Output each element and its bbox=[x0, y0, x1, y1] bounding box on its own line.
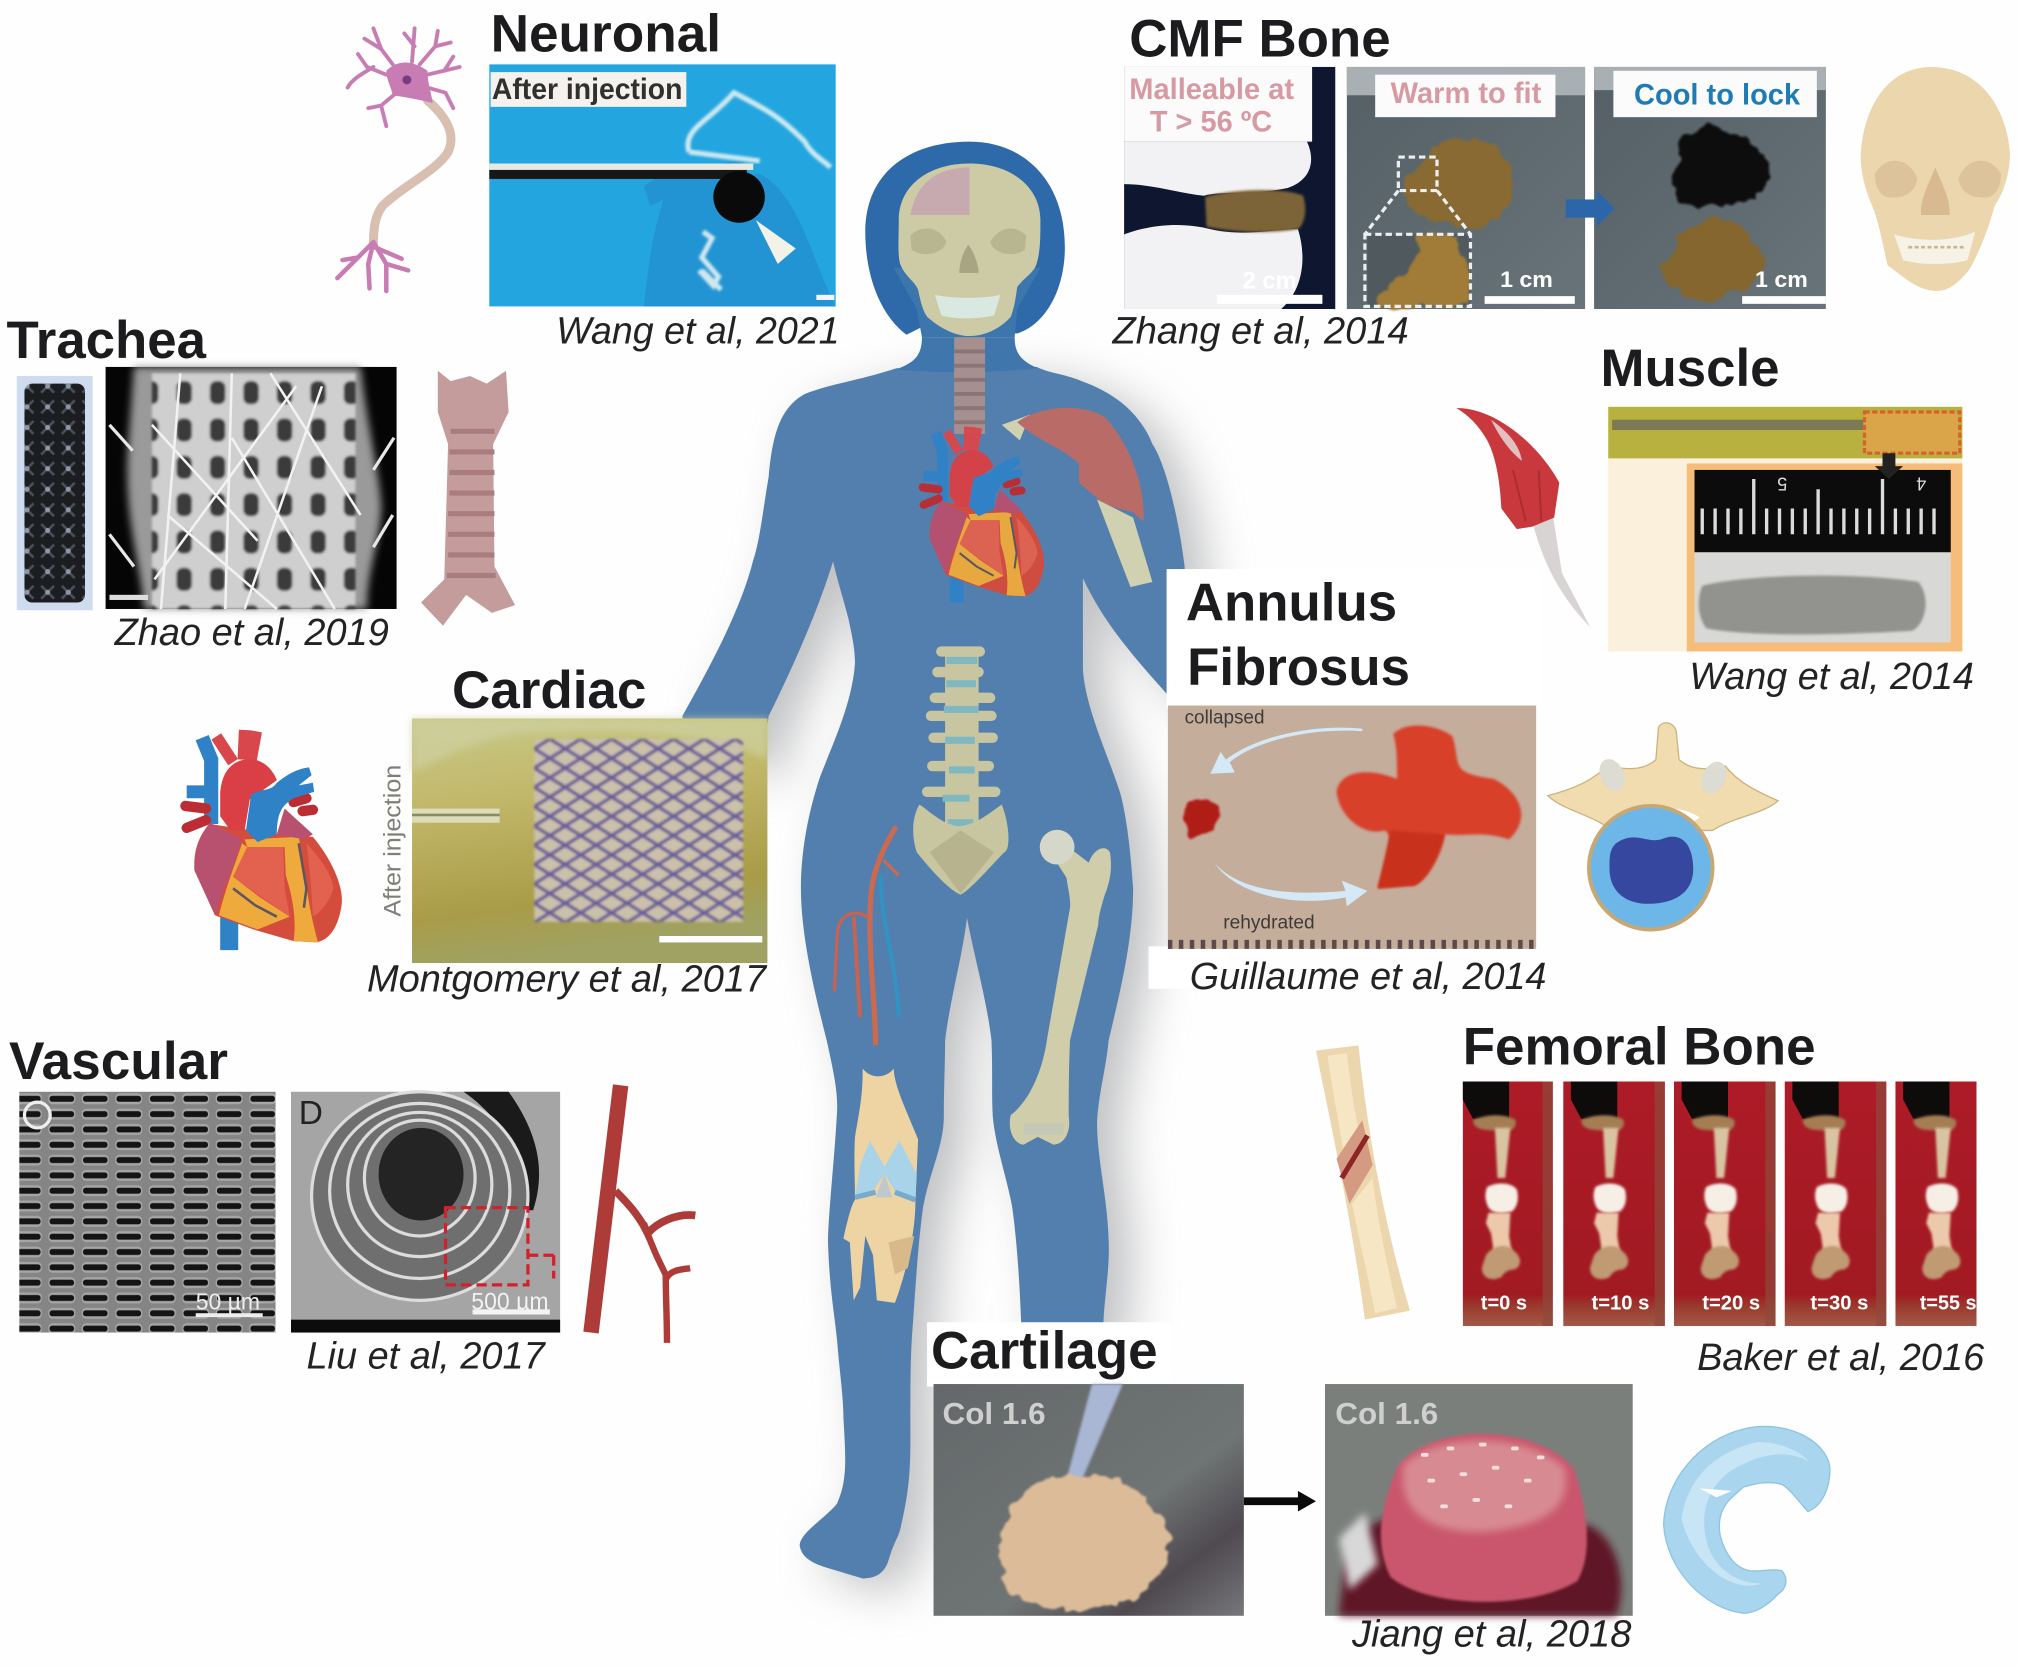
photo: printed tube bbox=[17, 376, 93, 610]
heading: Trachea bbox=[6, 311, 207, 370]
panel: femoral bone bbox=[1316, 1018, 1985, 1379]
heading bbox=[1186, 574, 1410, 697]
heading: Vascular bbox=[9, 1032, 228, 1091]
citation: Montgomery et al, 2017 bbox=[367, 958, 768, 1000]
citation: Guillaume et al, 2014 bbox=[1190, 956, 1546, 998]
arrow: warm to cool bbox=[1566, 191, 1615, 227]
icon: heart bbox=[185, 730, 342, 950]
photo: malleable at temperature: 2 cm bbox=[1243, 267, 1297, 294]
panel: cardiac bbox=[185, 661, 768, 1000]
heading: Neuronal bbox=[491, 5, 721, 63]
icon: trachea bbox=[421, 371, 515, 626]
heart in chest bbox=[923, 427, 1044, 602]
panel: vascular bbox=[9, 1032, 695, 1378]
jaw shade bbox=[894, 268, 1040, 337]
photo: muscle scaffold: 4 bbox=[1916, 474, 1926, 494]
heading: Fibrosus bbox=[1187, 638, 1410, 697]
arrow: injection to result bbox=[1244, 1491, 1316, 1512]
citation: Wang et al, 2021 bbox=[556, 311, 840, 353]
citation: Zhang et al, 2014 bbox=[1112, 311, 1409, 353]
citation: Baker et al, 2016 bbox=[1697, 1337, 1985, 1379]
citation: Wang et al, 2014 bbox=[1689, 656, 1974, 698]
photo: malleable at temperature: Malleable at bbox=[1129, 73, 1294, 106]
icon: meniscus bbox=[1664, 1426, 1830, 1613]
citation: Jiang et al, 2018 bbox=[1351, 1614, 1631, 1656]
photo: cardiac patch bbox=[412, 718, 767, 963]
photo: cool to lock: Cool to lock bbox=[1634, 78, 1801, 111]
photo: formed scaffold bbox=[1325, 1384, 1633, 1616]
white box behind annulus title bbox=[1167, 569, 1540, 708]
photo: injection in brain phantom: After injection bbox=[492, 73, 682, 106]
white patch beside annulus caption bbox=[1149, 946, 1226, 989]
photo: shape recovery: collapsed bbox=[1185, 708, 1264, 729]
photo series: bone filling: t=10 s bbox=[1592, 1291, 1649, 1314]
photo series: bone filling bbox=[1463, 1081, 1977, 1326]
panel: trachea bbox=[6, 311, 515, 654]
photo: formed scaffold: Col 1.6 bbox=[1335, 1396, 1438, 1431]
panel: neuronal bbox=[337, 5, 840, 353]
rotated photo label: After injection bbox=[379, 765, 406, 917]
icon: fractured bone bbox=[1316, 1045, 1410, 1320]
heading: CMF Bone bbox=[1129, 10, 1391, 69]
lumbar spine bbox=[913, 648, 1008, 895]
heading: Annulus bbox=[1186, 574, 1397, 633]
citation: Liu et al, 2017 bbox=[306, 1336, 547, 1378]
photo series: bone filling: t=0 s bbox=[1481, 1291, 1527, 1314]
body silhouette bbox=[682, 367, 1185, 1578]
icon: skull bbox=[1861, 67, 2010, 291]
photo series: bone filling: t=20 s bbox=[1702, 1291, 1760, 1314]
photo: muscle scaffold bbox=[1608, 407, 1962, 651]
photo: warm to fit: Warm to fit bbox=[1391, 77, 1541, 110]
human body figure with organs bbox=[682, 142, 1185, 1578]
photo: rolled tube bbox=[291, 1092, 560, 1333]
femur bbox=[1010, 830, 1111, 1145]
photo: injection of scaffold bbox=[934, 1384, 1244, 1616]
icon: neuron bbox=[337, 28, 460, 291]
white box behind cartilage title bbox=[927, 1322, 1172, 1387]
photo: muscle scaffold: 5 bbox=[1777, 474, 1787, 494]
photo: injection of scaffold: Col 1.6 bbox=[943, 1396, 1046, 1431]
photo: rolled tube: 500 µm bbox=[471, 1288, 549, 1315]
skull in head bbox=[898, 164, 1040, 336]
heading: Cardiac bbox=[452, 661, 646, 720]
photo: shape recovery: rehydrated bbox=[1223, 912, 1315, 933]
photo series: bone filling: t=30 s bbox=[1810, 1291, 1868, 1314]
photo: shape recovery bbox=[1168, 706, 1536, 949]
photo: malleable at temperature: T > 56 ºC bbox=[1150, 105, 1272, 138]
photo: micro mesh bbox=[19, 1092, 276, 1333]
photo: malleable at temperature bbox=[1124, 67, 1335, 309]
knee joint bbox=[843, 1069, 918, 1303]
photo: cool to lock: 1 cm bbox=[1755, 267, 1808, 292]
icon: muscle bbox=[1456, 408, 1590, 627]
panel: CMF bone bbox=[1112, 10, 2010, 353]
photo: rolled tube: D bbox=[299, 1095, 323, 1132]
shoulder muscle bbox=[1002, 408, 1152, 587]
neck bbox=[896, 337, 1038, 372]
heading: Muscle bbox=[1601, 339, 1780, 398]
heading: Cartilage bbox=[931, 1322, 1158, 1381]
icon: blood vessel bbox=[591, 1085, 695, 1343]
icon: vertebra with disc bbox=[1548, 723, 1778, 930]
photo: injection in brain phantom bbox=[489, 64, 836, 306]
photo: micro mesh: 50 µm bbox=[196, 1288, 260, 1314]
heading: Femoral Bone bbox=[1463, 1018, 1816, 1077]
photo: warm to fit: 1 cm bbox=[1500, 267, 1553, 292]
leg blood vessels bbox=[834, 827, 899, 1045]
citation: Zhao et al, 2019 bbox=[114, 612, 389, 654]
photo: cool to lock bbox=[1594, 67, 1826, 309]
trachea in neck bbox=[954, 337, 985, 434]
photo series: bone filling: t=55 s bbox=[1920, 1291, 1977, 1314]
panel: muscle bbox=[1456, 339, 1974, 698]
body shadow bbox=[706, 380, 1208, 1591]
hair hood bbox=[865, 142, 1065, 335]
panel: cartilage bbox=[931, 1322, 1830, 1656]
panel: annulus fibrosus bbox=[1168, 574, 1778, 998]
photo: warm to fit bbox=[1347, 67, 1585, 309]
photo: trachea scan bbox=[106, 367, 397, 609]
